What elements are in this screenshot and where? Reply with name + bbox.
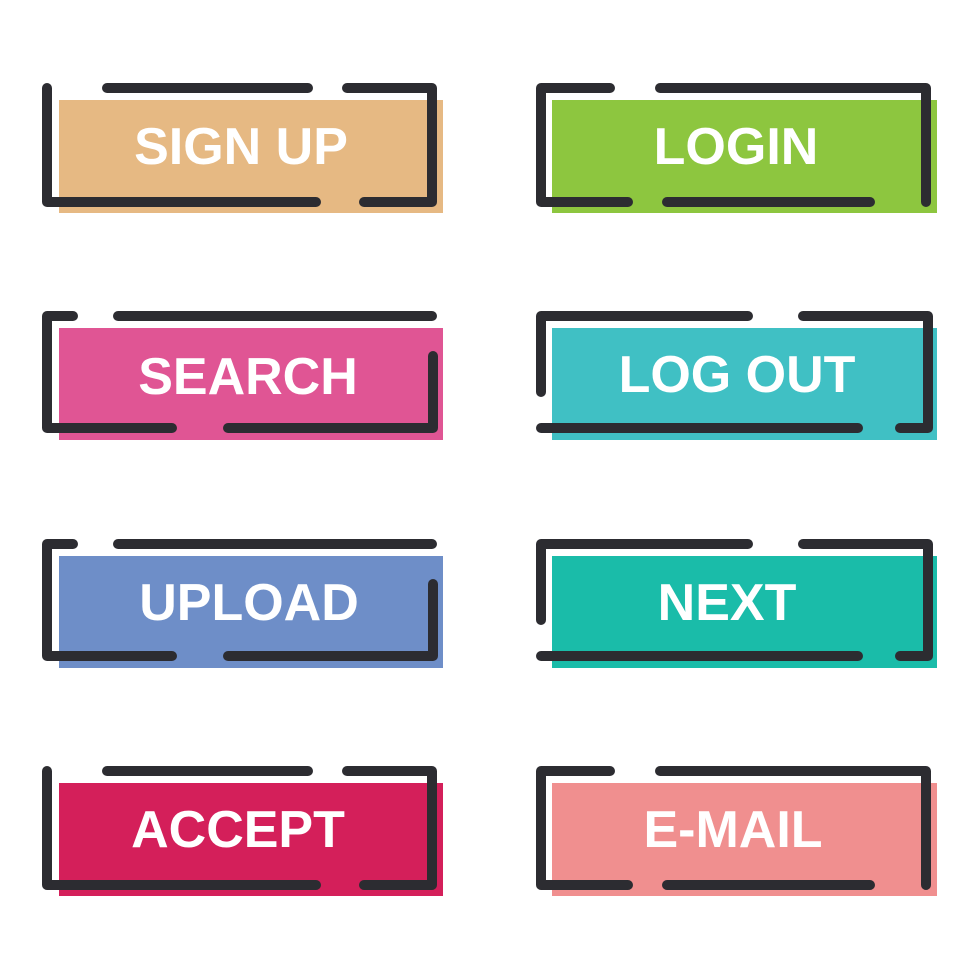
label: log out: LOG OUT (619, 346, 856, 404)
label: upload: UPLOAD (139, 574, 359, 632)
button: search (47, 316, 443, 440)
button: sign up (47, 88, 443, 213)
button: upload (47, 544, 443, 668)
label: e-mail: E-MAIL (643, 801, 823, 859)
label: accept: ACCEPT (131, 801, 345, 859)
button: log out (541, 316, 937, 440)
label: next: NEXT (658, 574, 797, 632)
label: sign up: SIGN UP (134, 118, 348, 176)
button: login (541, 88, 937, 213)
button: next (541, 544, 937, 668)
label: login: LOGIN (654, 118, 818, 176)
button: e-mail (541, 771, 937, 896)
button: accept (47, 771, 443, 896)
label: search: SEARCH (138, 348, 358, 406)
